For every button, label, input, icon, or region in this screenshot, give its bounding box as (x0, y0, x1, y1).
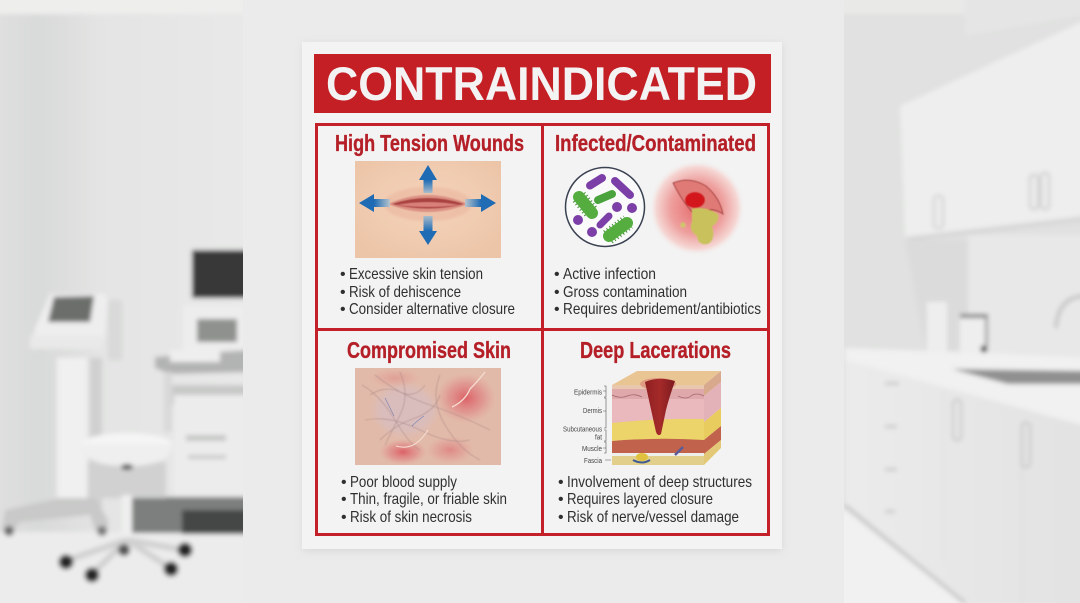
background: central wall (243, 0, 844, 603)
bullet list: compromised skin: Risk of skin necrosis (350, 509, 472, 526)
bullet list: high tension wounds (340, 266, 515, 318)
icon: infected wound with pus (649, 160, 745, 256)
illustration: wound under tension with arrows (355, 161, 501, 258)
bullet list: high tension wounds: Risk of dehiscence (349, 284, 461, 301)
diagram labels: skin layers: Muscle (582, 444, 602, 453)
bullet list: deep lacerations: Involvement of deep structures (567, 474, 752, 491)
bullet list: infected contaminated: • (554, 284, 560, 301)
stool (88, 462, 166, 498)
bullet list: compromised skin (341, 474, 507, 526)
panel: deep lacerations (558, 337, 752, 526)
bullet list: deep lacerations: • (558, 474, 564, 491)
diagram labels: skin layers: Dermis (583, 406, 602, 415)
heading: high tension wounds: High Tension Wounds (335, 130, 524, 156)
heading: compromised skin: Compromised Skin (347, 337, 511, 363)
bullet list: high tension wounds: • (340, 301, 346, 318)
bullet list: deep lacerations: • (558, 509, 564, 526)
panel: infected / contaminated (554, 130, 761, 318)
diagram labels: skin layers: Epidermis (574, 388, 602, 396)
bullet list: deep lacerations: Risk of nerve/vessel damage (567, 509, 739, 526)
icon: up arrow (419, 165, 437, 193)
diagram: skin cross-section (612, 371, 721, 465)
icon: down arrow (419, 216, 437, 245)
bullet list: infected contaminated: Gross contamination (563, 284, 687, 301)
bullet list: compromised skin: • (341, 491, 347, 508)
bullet list: high tension wounds: Consider alternative closure (349, 301, 515, 318)
panel: high tension wounds (335, 130, 524, 318)
bullet list: deep lacerations (558, 474, 752, 526)
bullet list: high tension wounds: Excessive skin tension (349, 266, 483, 283)
diagram labels: skin layers (563, 386, 611, 465)
bullet list: deep lacerations: Requires layered closure (567, 491, 713, 508)
icon: left arrow (359, 194, 390, 212)
bullet list: infected contaminated: Active infection (563, 266, 656, 283)
background: right clinic room with cabinets (836, 0, 1080, 603)
illustration: fragile skin photo (355, 368, 501, 465)
icon: right arrow (465, 194, 496, 212)
bullet list: compromised skin: • (341, 474, 347, 491)
title banner: CONTRAINDICATED (326, 57, 757, 110)
bullet list: compromised skin: • (341, 509, 347, 526)
bullet list: infected contaminated (554, 266, 761, 318)
icon: bacteria in petri circle (566, 168, 644, 246)
bullet list: compromised skin: Thin, fragile, or friable skin (350, 491, 507, 508)
heading: deep lacerations: Deep Lacerations (580, 337, 731, 363)
bullet list: high tension wounds: • (340, 266, 346, 283)
poster (302, 42, 782, 551)
bullet list: infected contaminated: Requires debridement/antibiotics (563, 301, 761, 318)
bullet list: high tension wounds: • (340, 284, 346, 301)
bullet list: compromised skin: Poor blood supply (350, 474, 457, 491)
machine one (32, 294, 108, 348)
diagram labels: skin layers: Fascia (584, 456, 603, 465)
heading: infected contaminated: Infected/Contaminated (555, 130, 756, 156)
background: left clinic room with equipment (0, 0, 248, 603)
panel grid frame (316, 124, 769, 535)
bullet list: infected contaminated: • (554, 266, 560, 283)
machine two (192, 250, 248, 298)
bullet list: infected contaminated: • (554, 301, 560, 318)
diagram labels: skin layers: fat (595, 432, 603, 442)
panel: compromised skin (341, 337, 511, 526)
bullet list: deep lacerations: • (558, 491, 564, 508)
diagram labels: skin layers: Subcutaneous (563, 424, 602, 434)
